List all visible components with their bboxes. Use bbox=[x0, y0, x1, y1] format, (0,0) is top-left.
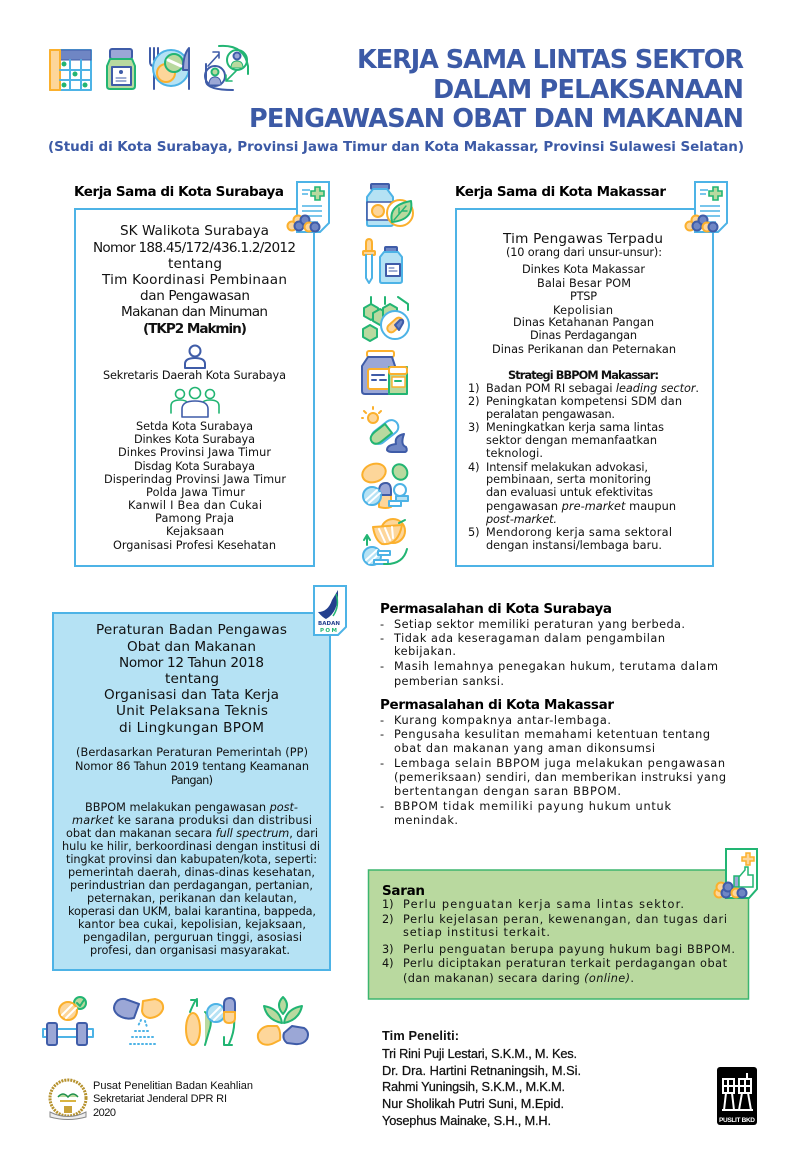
icon: sun, capsule and moon bbox=[362, 407, 407, 452]
list: recommendations: Perlu diciptakan peraturan terkait perdagangan obat bbox=[403, 957, 728, 970]
text: legal basis: Nomor 86 Tahun 2019 tentang Keamanan bbox=[75, 760, 309, 773]
text block: Permasalahan di Kota Makassar bbox=[380, 697, 726, 827]
text: BBPOM Makassar strategy bbox=[468, 369, 699, 552]
list: recommendations: Perlu penguatan berupa payung hukum bagi BBPOM. bbox=[403, 943, 735, 956]
icon: BPOM document bbox=[314, 586, 346, 635]
text: BBPOM description: tingkat provinsi dan kabupaten/kota, seperti: bbox=[66, 853, 317, 866]
text: regulation title: Unit Pelaksana Teknis bbox=[116, 703, 268, 719]
text: integrated supervisory team: Tim Pengawas Terpadu bbox=[502, 231, 663, 247]
list: recommendations bbox=[382, 898, 735, 985]
text block: Permasalahan di Kota Makassar: - bbox=[380, 800, 384, 813]
icon: table schedule bbox=[50, 50, 91, 90]
text block: Permasalahan di Kota Makassar: menindak. bbox=[394, 814, 458, 827]
column: centre icons bbox=[360, 184, 413, 565]
text block: Permasalahan di Kota Makassar: (pemeriksaan) sendiri, dan memberikan instruksi yang bbox=[394, 771, 726, 784]
text: legal basis: (Berdasarkan Peraturan Pemerintah (PP) bbox=[76, 746, 308, 759]
subtitle: (Studi di Kota Surabaya, Provinsi Jawa Timur dan Kota Makassar, Provinsi Sulawesi Selatan) bbox=[48, 139, 744, 155]
text: BBPOM Makassar strategy: 3) bbox=[468, 421, 480, 434]
text: legal basis: Pangan) bbox=[171, 774, 213, 787]
text: integrated supervisory team: Kepolisian bbox=[553, 304, 613, 317]
text: research team bbox=[382, 1028, 581, 1128]
text: legal basis bbox=[75, 746, 309, 787]
text block: Permasalahan di Kota Makassar: Kurang kompaknya antar-lembaga. bbox=[394, 714, 611, 727]
text: BBPOM Makassar strategy: pengawasan pre-market maupun bbox=[486, 500, 676, 513]
text: member institutions: Disperindag Provinsi Jawa Timur bbox=[104, 473, 286, 486]
list: recommendations: (dan makanan) secara daring (online). bbox=[403, 972, 634, 985]
text: member institutions: Pamong Praja bbox=[155, 512, 234, 525]
text: decree bbox=[93, 223, 296, 337]
text: BBPOM Makassar strategy: Strategi BBPOM Makassar: bbox=[508, 369, 659, 382]
panel background: Saran bbox=[368, 870, 748, 999]
text: decree: (TKP2 Makmin) bbox=[143, 321, 247, 337]
text: research team: Yosephus Mainake, S.H., M.H. bbox=[382, 1113, 551, 1128]
text: decree: Tim Koordinasi Pembinaan bbox=[101, 272, 287, 288]
text: institution: Pusat Penelitian Badan Keahlian bbox=[93, 1080, 253, 1092]
text: member institutions: Organisasi Profesi Kesehatan bbox=[113, 539, 276, 552]
text: research team: Tri Rini Puji Lestari, S.K.M., M. Kes. bbox=[382, 1046, 577, 1061]
panel: BPOM regulation bbox=[53, 586, 346, 970]
text: BBPOM description: pengadilan, perguruan tinggi, asosiasi bbox=[83, 931, 302, 944]
icon: capsule and leaves bbox=[258, 997, 308, 1045]
list: recommendations: 4) bbox=[382, 957, 394, 970]
text block: Permasalahan di Kota Surabaya: Setiap sektor memiliki peraturan yang berbeda. bbox=[394, 618, 685, 631]
text: regulation title: Peraturan Badan Pengawas bbox=[96, 622, 287, 638]
text: decree: SK Walikota Surabaya bbox=[120, 223, 269, 239]
heading: Surabaya: Kerja Sama di Kota Surabaya bbox=[74, 184, 284, 200]
text: integrated supervisory team: Dinas Ketahanan Pangan bbox=[513, 316, 654, 329]
text block: Permasalahan di Kota Surabaya: - bbox=[380, 618, 384, 631]
text: BBPOM description bbox=[62, 801, 320, 957]
text: regulation title: Organisasi dan Tata Kerja bbox=[104, 687, 279, 703]
icon: jar bbox=[107, 49, 135, 89]
text: regulation title: tentang bbox=[165, 671, 219, 687]
text: BBPOM description: market ke sarana produksi dan distribusi bbox=[72, 814, 312, 827]
text block: Permasalahan di Kota Surabaya: kebijakan. bbox=[394, 645, 456, 658]
text: BBPOM Makassar strategy: peralatan pengawasan. bbox=[486, 408, 615, 421]
text: BBPOM description: peternakan, perikanan dan kelautan, bbox=[87, 892, 297, 905]
text: member institutions: Kejaksaan bbox=[166, 525, 224, 538]
list: recommendations: Perlu penguatan kerja sama lintas sektor. bbox=[403, 898, 684, 911]
text block: Permasalahan di Kota Surabaya bbox=[380, 601, 718, 688]
icon: BPOM document: BADAN bbox=[318, 621, 340, 627]
title: DALAM PELAKSANAAN bbox=[433, 75, 744, 105]
text: integrated supervisory team: (10 orang dari unsur-unsur): bbox=[506, 246, 662, 259]
text: BBPOM Makassar strategy: teknologi. bbox=[486, 447, 543, 460]
icon: bottle and leaf bbox=[367, 184, 413, 226]
text: BBPOM Makassar strategy: Badan POM RI sebagai leading sector. bbox=[486, 382, 699, 395]
text: BBPOM description: BBPOM melakukan pengawasan post- bbox=[85, 801, 298, 814]
text: BBPOM description: hulu ke hilir, berkoordinasi dengan institusi di bbox=[62, 840, 320, 853]
text block: Permasalahan di Kota Surabaya: pemberian sanksi. bbox=[394, 675, 504, 688]
text: BBPOM Makassar strategy: 1) bbox=[468, 382, 480, 395]
text: BBPOM Makassar strategy: Intensif melakukan advokasi, bbox=[486, 461, 648, 474]
logo: Puslit BKD bbox=[717, 1067, 757, 1125]
logo: Puslit BKD: PUSLIT BKD bbox=[719, 1117, 755, 1124]
icon: assorted pills bbox=[360, 460, 410, 508]
icon: capsule with powder bbox=[114, 999, 163, 1044]
text: institution bbox=[93, 1080, 253, 1119]
text block: Permasalahan di Kota Surabaya: Tidak ada keseragaman dalam pengambilan bbox=[393, 632, 665, 645]
text block: Permasalahan di Kota Makassar: bertentangan dengan saran BBPOM. bbox=[394, 785, 621, 798]
list: recommendations: 1) bbox=[382, 898, 394, 911]
icon row: header icons bbox=[50, 46, 248, 90]
text: member institutions: Kanwil I Bea dan Cukai bbox=[128, 499, 262, 512]
text: research team: Rahmi Yuningsih, S.K.M., M.K.M. bbox=[382, 1079, 565, 1094]
icon: plate with pill bbox=[150, 48, 189, 89]
icon: document with pills bbox=[288, 182, 329, 232]
text: BBPOM Makassar strategy: Meningkatkan kerja sama lintas bbox=[486, 421, 664, 434]
text: BBPOM Makassar strategy: dan evaluasi untuk efektivitas bbox=[486, 486, 653, 499]
text: institution: 2020 bbox=[93, 1107, 116, 1119]
list: recommendations: Perlu kejelasan peran, kewenangan, dan tugas dari bbox=[403, 913, 727, 926]
text: BBPOM Makassar strategy: Peningkatan kompetensi SDM dan bbox=[486, 395, 682, 408]
text block: Permasalahan di Kota Surabaya: Permasalahan di Kota Surabaya bbox=[380, 601, 612, 617]
title: PENGAWASAN OBAT DAN MAKANAN bbox=[249, 104, 744, 134]
icon: dumbbell with pill bbox=[43, 997, 93, 1045]
text: regulation title bbox=[96, 622, 287, 736]
text: integrated supervisory team: Dinas Perdagangan bbox=[530, 329, 637, 342]
list: recommendations: 2) bbox=[382, 913, 394, 926]
text block: Permasalahan di Kota Makassar: Pengusaha kesulitan memahami ketentuan tentang bbox=[394, 728, 710, 741]
icon: BPOM document: POM bbox=[320, 628, 337, 634]
text: decree: Makanan dan Minuman bbox=[121, 304, 268, 320]
text: research team: Dr. Dra. Hartini Retnaningsih, M.Si. bbox=[382, 1063, 581, 1078]
text: BBPOM Makassar strategy: dengan instansi/lembaga baru. bbox=[486, 539, 662, 552]
text: research team: Nur Sholikah Putri Suni, M.Epid. bbox=[382, 1096, 564, 1111]
text: regulation title: di Lingkungan BPOM bbox=[119, 720, 264, 736]
text block: Permasalahan di Kota Surabaya: - bbox=[380, 632, 384, 645]
icon: thumbs-up document bbox=[714, 849, 757, 898]
heading: Makassar: Kerja Sama di Kota Makassar bbox=[455, 184, 666, 200]
text: member institutions: Polda Jawa Timur bbox=[146, 486, 245, 499]
icon: people cycle bbox=[205, 46, 248, 90]
icon: molecule and capsule bbox=[363, 297, 409, 341]
text: integrated supervisory team bbox=[492, 231, 676, 356]
text block: Permasalahan di Kota Makassar: BBPOM tidak memiliki payung hukum untuk bbox=[394, 800, 671, 813]
text: BBPOM Makassar strategy: Mendorong kerja sama sektoral bbox=[486, 526, 672, 539]
icon: group bbox=[171, 388, 219, 417]
text: regulation title: Nomor 12 Tahun 2018 bbox=[119, 655, 264, 671]
text: BBPOM Makassar strategy: 4) bbox=[468, 461, 480, 474]
title bbox=[249, 45, 744, 134]
list: recommendations: 3) bbox=[382, 943, 394, 956]
text: member institutions bbox=[104, 420, 286, 552]
icon row: bottom icons bbox=[43, 997, 308, 1045]
text: decree: tentang bbox=[168, 256, 222, 272]
text: research team: Tim Peneliti: bbox=[382, 1028, 459, 1043]
text: BBPOM description: kantor bea cukai, kepolisian, kejaksaan, bbox=[78, 918, 306, 931]
text block: Permasalahan di Kota Makassar: - bbox=[380, 714, 384, 727]
title: KERJA SAMA LINTAS SEKTOR bbox=[357, 45, 744, 75]
text block: Permasalahan di Kota Surabaya: - bbox=[380, 660, 384, 673]
text: member institutions: Dinkes Provinsi Jawa Timur bbox=[118, 446, 271, 459]
icon: corn, pill and arrows bbox=[186, 998, 235, 1045]
icon: jar with labels bbox=[362, 351, 407, 394]
text: BBPOM Makassar strategy: sektor dengan memanfaatkan bbox=[486, 434, 657, 447]
text: member institutions: Setda Kota Surabaya bbox=[136, 420, 253, 433]
panel background: BPOM bbox=[53, 613, 330, 970]
text: regulation title: Obat dan Makanan bbox=[127, 639, 256, 655]
text block: Permasalahan di Kota Makassar: - bbox=[380, 728, 384, 741]
panel border: Surabaya bbox=[75, 209, 314, 566]
text: BBPOM description: profesi, dan organisasi masyarakat. bbox=[90, 944, 290, 957]
text: decree: dan Pengawasan bbox=[140, 288, 250, 304]
panel: Kerja Sama di Kota Makassar bbox=[455, 182, 727, 566]
text: BBPOM description: perindustrian dan perdagangan, pertanian, bbox=[70, 879, 313, 892]
text block: Permasalahan di Kota Makassar: obat dan makanan yang aman dikonsumsi bbox=[394, 742, 655, 755]
text: integrated supervisory team: Dinkes Kota Makassar bbox=[522, 263, 645, 276]
logo: DPR seal bbox=[50, 1080, 86, 1120]
text: BBPOM description: obat dan makanan secara full spectrum, dari bbox=[66, 827, 318, 840]
icon: dropper and bottle bbox=[363, 239, 402, 283]
list: recommendations: setiap institusi terkait. bbox=[403, 926, 550, 939]
panel: Kerja Sama di Kota Surabaya bbox=[74, 182, 329, 566]
text: BBPOM Makassar strategy: post-market. bbox=[485, 513, 557, 526]
panel border: Makassar bbox=[456, 209, 713, 566]
icon: orange and pill bbox=[363, 519, 407, 565]
text block: Permasalahan di Kota Makassar: Permasalahan di Kota Makassar bbox=[380, 697, 614, 713]
text: BBPOM Makassar strategy: 2) bbox=[468, 395, 480, 408]
text: regional secretary: Sekretaris Daerah Kota Surabaya bbox=[103, 369, 286, 382]
text: integrated supervisory team: Dinas Perikanan dan Peternakan bbox=[492, 343, 676, 356]
text: member institutions: Disdag Kota Surabaya bbox=[134, 460, 255, 473]
text: member institutions: Dinkes Kota Surabaya bbox=[134, 433, 255, 446]
heading: Saran: Saran bbox=[382, 883, 425, 899]
text: BBPOM description: koperasi dan UKM, balai karantina, bappeda, bbox=[68, 905, 316, 918]
panel: Saran bbox=[368, 849, 757, 999]
text block: Permasalahan di Kota Makassar: Lembaga selain BBPOM juga melakukan pengawasan bbox=[394, 757, 725, 770]
text: decree: Nomor 188.45/172/436.1.2/2012 bbox=[93, 240, 296, 256]
icon: document with pills bbox=[686, 182, 727, 232]
text: integrated supervisory team: PTSP bbox=[570, 290, 597, 303]
text block: Permasalahan di Kota Surabaya: Masih lemahnya penegakan hukum, terutama dalam bbox=[394, 660, 718, 673]
text: integrated supervisory team: Balai Besar POM bbox=[537, 277, 631, 290]
text: institution: Sekretariat Jenderal DPR RI bbox=[93, 1093, 227, 1105]
text: BBPOM Makassar strategy: 5) bbox=[468, 526, 480, 539]
text: BBPOM description: pemerintah daerah, dinas-dinas kesehatan, bbox=[68, 866, 315, 879]
text: BBPOM Makassar strategy: pembinaan, serta monitoring bbox=[486, 473, 651, 486]
icon: person bbox=[185, 346, 205, 368]
text block: Permasalahan di Kota Makassar: - bbox=[380, 757, 384, 770]
